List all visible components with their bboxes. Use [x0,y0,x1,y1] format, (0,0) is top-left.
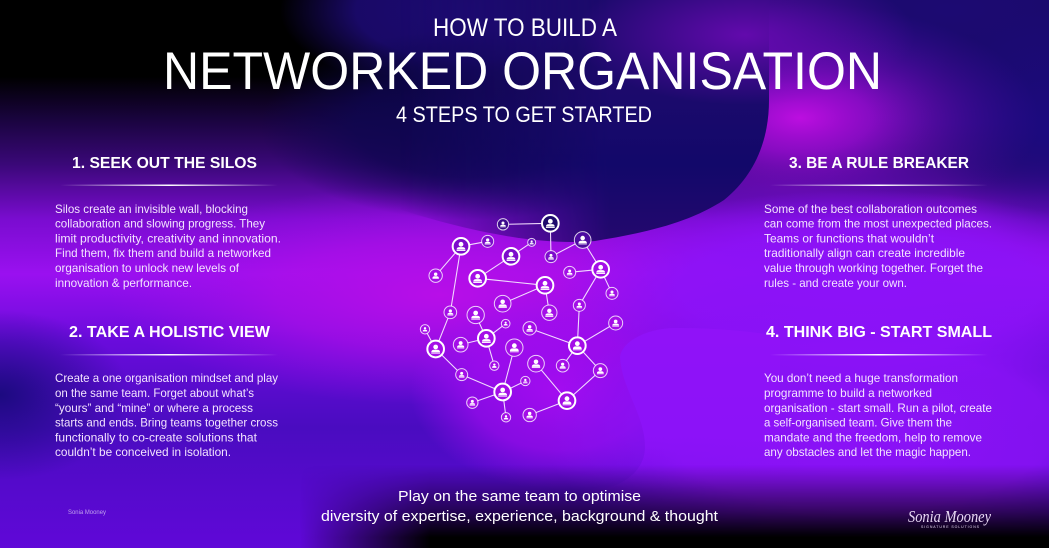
heading: step 1: 1. SEEK OUT THE SILOS [72,155,257,172]
closing line 1: Play on the same team to optimise [398,488,641,505]
text: step 4: a self-organised team. Give them the [764,416,952,430]
text: step 1: limit productivity, creativity and innovation. [55,232,281,246]
text: step 2: Create a one organisation mindset and play [55,371,278,385]
title line 2: NETWORKED ORGANISATION [163,42,882,101]
signature name: Sonia Mooney [908,507,991,526]
text: step 1: Silos create an invisible wall, blocking [55,202,248,216]
text: step 3: rules - and create your own. [764,276,907,290]
text: step 2: “yours” and “mine” or where a process [55,401,253,415]
text: step 4: organisation - start small. Run a pilot, create [764,401,992,415]
network diagram [420,215,623,422]
panel: step 4 [764,324,992,459]
text: step 4: programme to build a networked [764,386,932,400]
text: step 2: couldn’t be conceived in isolation. [55,445,231,459]
text: step 4 [764,371,992,459]
title [163,14,882,127]
credit: Sonia Mooney [68,510,106,516]
text: step 3: Some of the best collaboration outcomes [764,202,977,216]
heading: step 2: 2. TAKE A HOLISTIC VIEW [69,324,270,341]
panel: step 1 [55,155,281,290]
text: step 2: starts and ends. Bring teams together cross [55,416,278,430]
text: step 1: innovation & performance. [55,276,192,290]
text: step 1: collaboration and slowing progress. They [55,216,265,230]
text: step 3: traditionally align can create incredible [764,246,965,260]
text: step 3: can come from the most unexpected places. [764,216,992,230]
text: step 2: on the same team. Forget about what’s [55,386,254,400]
signature tagline: SIGNATURE SOLUTIONS [921,525,980,529]
title line 1: HOW TO BUILD A [433,14,617,42]
text: step 4: You don’t need a huge transformation [764,371,958,385]
text: step 1: Find them, fix them and build a networked [55,246,271,260]
closing statement [321,488,719,525]
panel: step 3 [764,155,992,290]
panel: step 2 [55,324,278,459]
text: step 4: mandate and the freedom, help to remove [764,430,982,444]
text: step 3: Teams or functions that wouldn’t [764,232,935,246]
heading: step 3: 3. BE A RULE BREAKER [789,155,969,172]
text: step 3 [764,202,992,290]
signature logo [908,507,991,529]
text: step 4: any obstacles and let the magic happen. [764,445,971,459]
text: step 2: functionally to co-create solutions that [55,430,258,444]
text: step 2 [55,371,278,459]
text: step 3: value through working together. Forget the [764,261,983,275]
text: step 1: organisation to unlock new levels of [55,261,240,275]
heading: step 4: 4. THINK BIG - START SMALL [766,324,992,341]
text: step 1 [55,202,281,290]
closing line 2: diversity of expertise, experience, background & thought [321,508,719,525]
title line 3: 4 STEPS TO GET STARTED [396,102,652,127]
